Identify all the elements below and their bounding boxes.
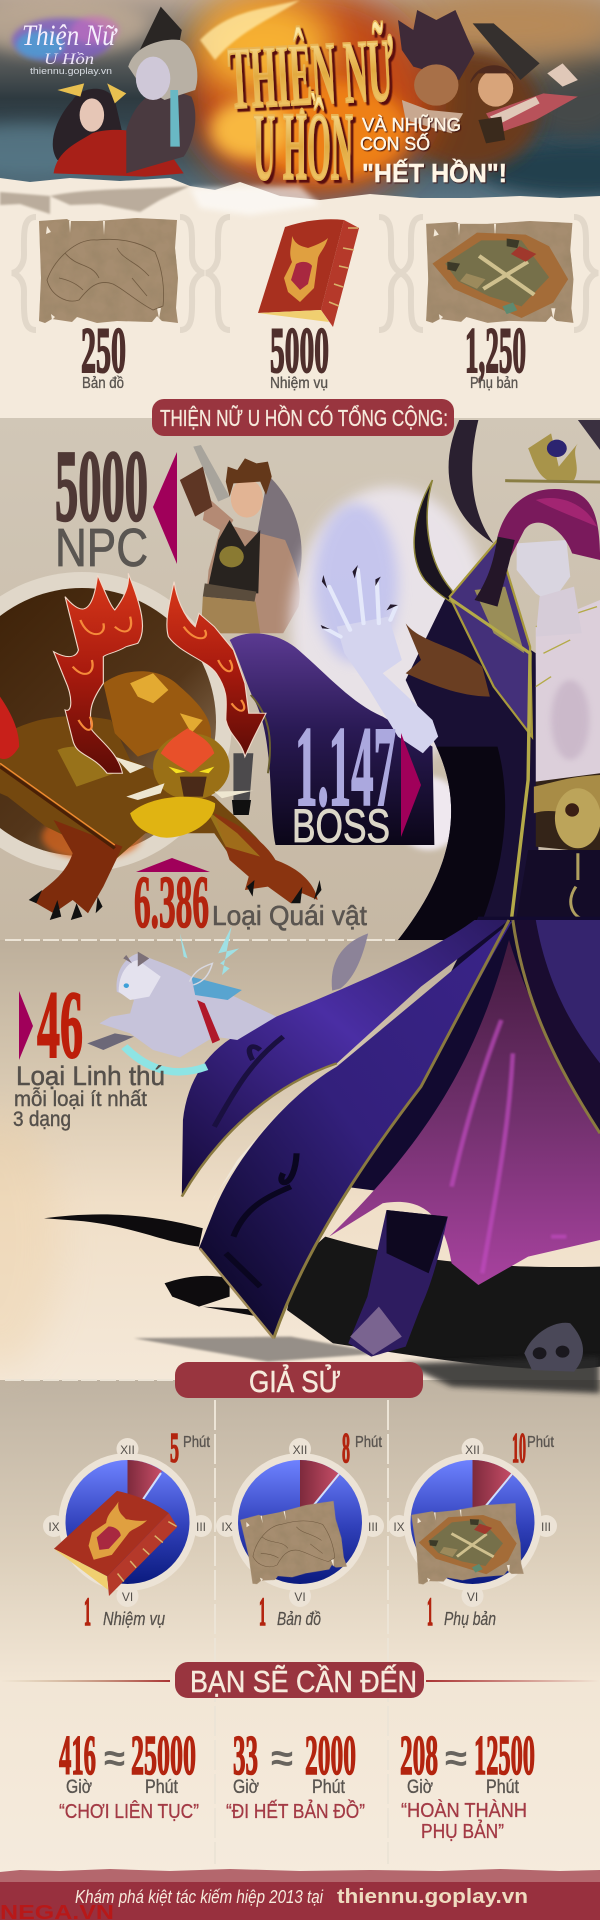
clock: quest 5 minutes: Nhiệm vụ bbox=[103, 1609, 165, 1629]
clock: quest 5 minutes: XII bbox=[120, 1443, 135, 1457]
clock: quest 5 minutes: 1 bbox=[84, 1589, 91, 1634]
result: quests time: Phút bbox=[145, 1777, 179, 1798]
title subtext: "HẾT HỒN"! bbox=[362, 158, 507, 188]
stat: 250 maps bbox=[39, 218, 178, 392]
stat: 5000 NPC: NPC bbox=[55, 518, 148, 578]
clock: map 8 minutes: XII bbox=[293, 1443, 307, 1457]
heading: BẠN SẼ CẦN ĐẾN: BẠN SẼ CẦN ĐẾN bbox=[190, 1664, 417, 1699]
character: NPC warrior bbox=[180, 445, 302, 815]
dashed dividers bbox=[5, 1380, 388, 1864]
stat: 6.386 monsters: Loại Quái vật bbox=[212, 900, 367, 931]
stat: 5000 quests: 5000 bbox=[270, 315, 329, 387]
clock: map 8 minutes: IX bbox=[221, 1520, 233, 1534]
ink wash under mage bbox=[44, 1214, 600, 1393]
result: dungeons time: Phút bbox=[486, 1777, 520, 1798]
result: quests time: “CHƠI LIÊN TỤC” bbox=[59, 1800, 199, 1823]
main title bbox=[226, 19, 397, 201]
mage robe bbox=[182, 917, 600, 1357]
stat: 250 maps: 250 bbox=[81, 315, 126, 387]
clock: dungeon 10 minutes: IX bbox=[393, 1520, 405, 1534]
clock: map 8 minutes: 8 bbox=[342, 1426, 350, 1472]
characters left bbox=[53, 7, 197, 177]
clock: dungeon 10 minutes: VI bbox=[467, 1590, 478, 1604]
clock: map 8 minutes: Phút bbox=[355, 1434, 382, 1451]
text: 1.147 bbox=[295, 703, 396, 830]
clock: map 8 minutes bbox=[216, 1426, 384, 1634]
result: maps time: Giờ bbox=[233, 1777, 259, 1798]
clock: dungeon 10 minutes: Phụ bản bbox=[444, 1609, 496, 1629]
beast flame tail bbox=[0, 697, 19, 759]
clock: quest 5 minutes bbox=[43, 1426, 212, 1634]
stat: 46 spirit beasts: Loại Linh thú bbox=[16, 1061, 165, 1091]
torn paper edge of header bbox=[0, 178, 600, 240]
beast flame crest right bbox=[167, 582, 266, 757]
clock: quest 5 minutes: III bbox=[196, 1520, 206, 1534]
footer band: Khám phá kiệt tác kiếm hiệp 2013 tại bbox=[75, 1887, 324, 1907]
logo: thiennu.goplay.vn bbox=[30, 66, 112, 76]
title subtext bbox=[360, 114, 507, 188]
result: quests time bbox=[59, 1725, 199, 1823]
pill: total heading: THIỆN NỮ U HỒN CÓ TỔNG CỘNG: bbox=[160, 404, 448, 431]
stat: 5000 NPC bbox=[55, 430, 177, 578]
stat: 46 spirit beasts: 46 bbox=[37, 971, 83, 1078]
result: dungeons time bbox=[400, 1725, 535, 1843]
mage aura glow bbox=[291, 487, 490, 850]
clock: map 8 minutes: 1 bbox=[259, 1589, 266, 1634]
title subtext: CON SỐ bbox=[360, 133, 430, 154]
characters right bbox=[398, 10, 578, 143]
decorative braces bbox=[12, 217, 598, 330]
clock: dungeon 10 minutes: 1 bbox=[427, 1589, 433, 1634]
logo: U Hồn bbox=[44, 51, 94, 68]
result: maps time: Phút bbox=[312, 1777, 346, 1798]
heading: GIẢ SỬ bbox=[175, 1362, 423, 1399]
clock: dungeon 10 minutes: XII bbox=[465, 1443, 480, 1457]
disc behind beast bbox=[0, 572, 232, 872]
clock: dungeon 10 minutes: 10 bbox=[512, 1426, 526, 1472]
logo bbox=[12, 16, 119, 76]
clock: map 8 minutes: VI bbox=[294, 1590, 306, 1604]
stat: 1,250 dungeons bbox=[426, 221, 573, 392]
result: maps time: 2000 bbox=[305, 1725, 356, 1787]
result: dungeons time: Giờ bbox=[407, 1777, 433, 1798]
result: dungeons time: PHỤ BẢN” bbox=[421, 1820, 504, 1843]
result: maps time: 33 bbox=[233, 1725, 258, 1787]
result: maps time: “ĐI HẾT BẢN ĐỒ” bbox=[226, 1799, 365, 1823]
result: quests time: ≈ bbox=[104, 1738, 125, 1780]
clock: quest 5 minutes: VI bbox=[122, 1590, 133, 1604]
clock: quest 5 minutes: 5 bbox=[170, 1426, 179, 1472]
clock: quest 5 minutes: IX bbox=[48, 1520, 60, 1534]
result: quests time: Giờ bbox=[66, 1777, 92, 1798]
clock: dungeon 10 minutes bbox=[388, 1426, 557, 1634]
stat: 6.386 monsters bbox=[134, 858, 367, 944]
title subtext: VÀ NHỮNG bbox=[362, 114, 461, 135]
clock: dungeon 10 minutes: Phút bbox=[527, 1434, 554, 1451]
result: quests time: 416 bbox=[59, 1725, 96, 1787]
heading: BẠN SẼ CẦN ĐẾN bbox=[0, 1662, 600, 1699]
clock: map 8 minutes: Bản đồ bbox=[277, 1609, 321, 1629]
pill: total heading bbox=[152, 399, 454, 436]
stat: 6.386 monsters: 6.386 bbox=[134, 862, 209, 944]
text: 25000 bbox=[131, 1725, 196, 1787]
footer band: thiennu.goplay.vn bbox=[337, 1886, 528, 1908]
dashed divider bbox=[5, 939, 395, 941]
result: maps time bbox=[226, 1725, 365, 1823]
stat: 1.147 boss: BOSS bbox=[292, 799, 390, 852]
stat: 5000 quests: Nhiệm vụ bbox=[270, 375, 328, 392]
footer band bbox=[0, 1869, 600, 1920]
stat: 46 spirit beasts bbox=[13, 971, 165, 1131]
spirit beast cat bbox=[87, 927, 368, 1072]
beast monster bbox=[0, 573, 321, 920]
stat: 250 maps: Bản đồ bbox=[82, 375, 124, 392]
stat: 1,250 dungeons: Phụ bản bbox=[470, 375, 518, 392]
clock: dungeon 10 minutes: III bbox=[541, 1520, 551, 1534]
stat: 1.147 boss bbox=[292, 703, 421, 852]
stat: 5000 NPC: 5000 bbox=[55, 430, 148, 543]
result: dungeons time: ≈ bbox=[445, 1738, 467, 1780]
mage upper body bbox=[230, 420, 600, 940]
stat: 46 spirit beasts: mỗi loại ít nhất bbox=[14, 1088, 147, 1111]
result: dungeons time: “HOÀN THÀNH bbox=[401, 1799, 527, 1822]
clock: map 8 minutes: III bbox=[368, 1520, 378, 1534]
stat: 5000 quests bbox=[258, 219, 359, 392]
beast flame crest left bbox=[54, 573, 143, 773]
logo: Thiện Nữ bbox=[22, 19, 118, 52]
result: maps time: ≈ bbox=[271, 1738, 293, 1780]
stat: 46 spirit beasts: 3 dạng bbox=[13, 1108, 71, 1131]
result: dungeons time: 208 bbox=[400, 1725, 438, 1787]
clock: quest 5 minutes: Phút bbox=[183, 1434, 210, 1451]
heading: GIẢ SỬ: GIẢ SỬ bbox=[249, 1363, 341, 1399]
header banner artwork bbox=[0, 0, 600, 205]
character: boss mage bbox=[44, 420, 600, 1393]
text: U HỒN bbox=[253, 92, 353, 201]
